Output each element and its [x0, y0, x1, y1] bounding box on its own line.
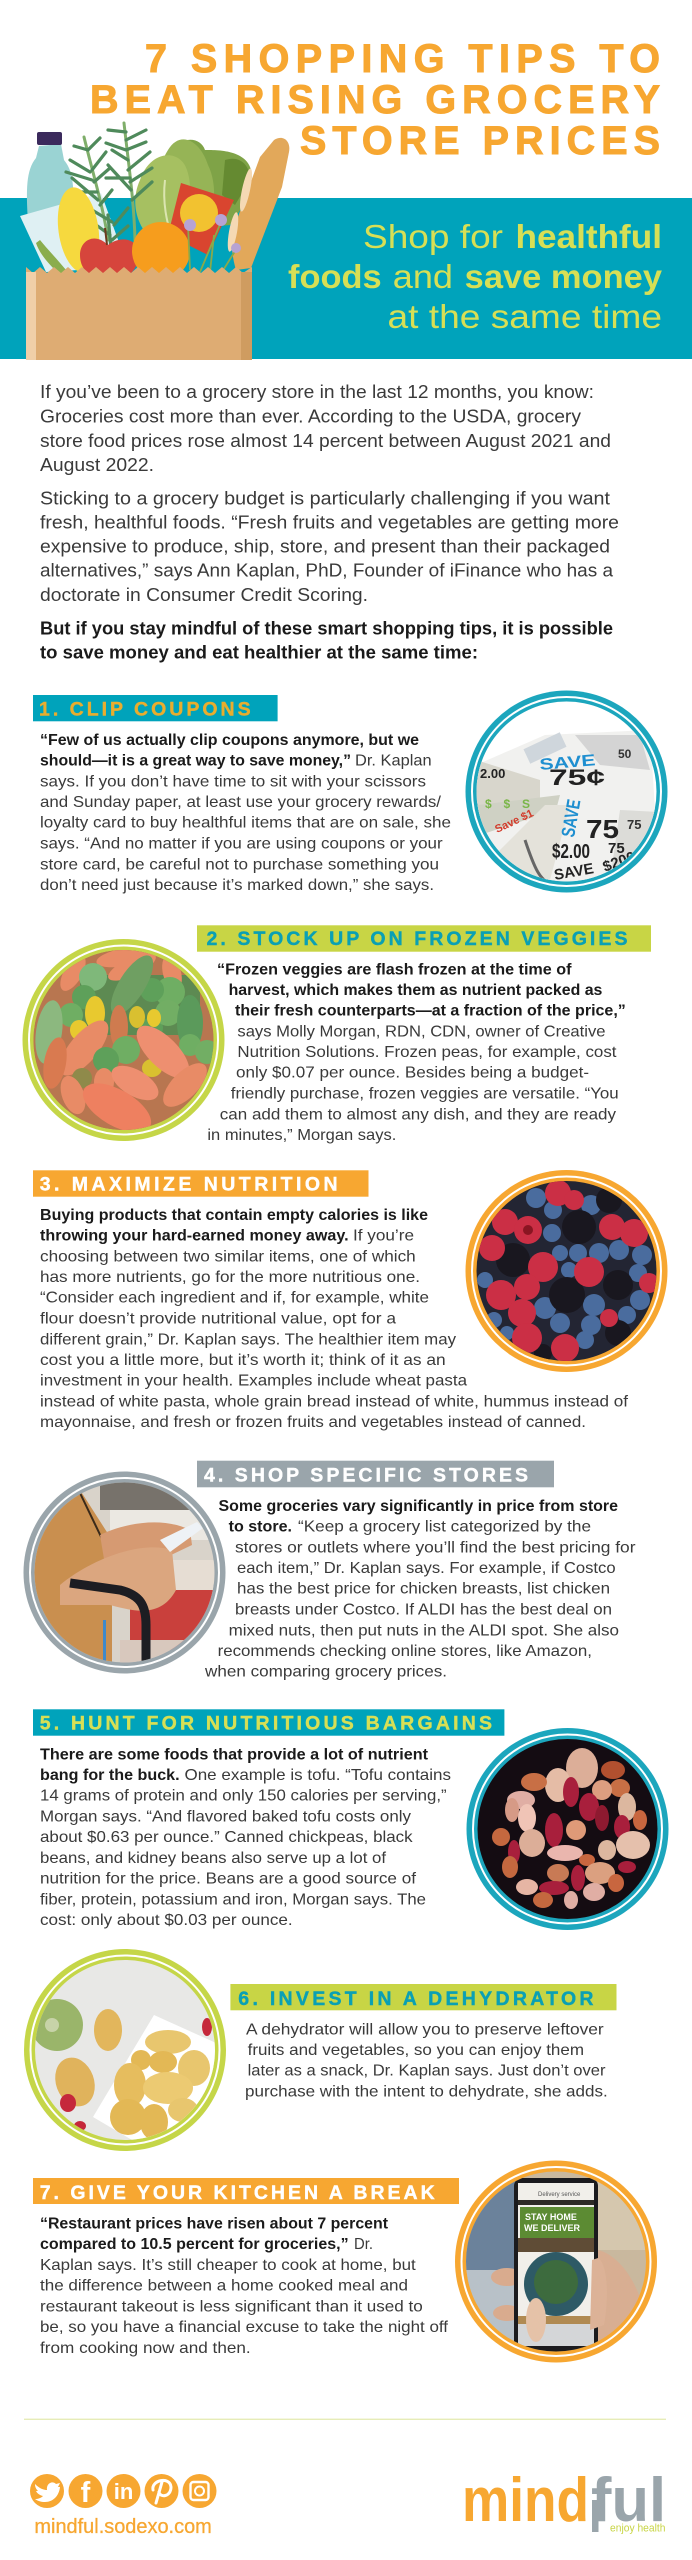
text block: tip 4: has the best price for chicken breasts, list chicken [237, 1581, 610, 1598]
text block: tip 5: bang for the buck. [40, 1767, 180, 1784]
text block: tip 2: in minutes,” Morgan says. [207, 1127, 396, 1144]
text block: tip 3: investment in your health. Examples include wheat pasta [40, 1373, 467, 1390]
text block: tip 6: A dehydrator will allow you to preserve leftover [246, 2021, 604, 2038]
text block: tip 5: One example is tofu. “Tofu contains [184, 1767, 451, 1784]
subtitle: foods [288, 258, 382, 295]
text block: tip 7: compared to 10.5 percent for groceries,” [40, 2236, 349, 2253]
footer divider [24, 2419, 666, 2420]
text block: tip 5: Morgan says. “And flavored baked tofu costs only [40, 1808, 411, 1825]
heading: tip 3: 3. MAXIMIZE NUTRITION [40, 1174, 338, 1196]
icon: baguette [226, 138, 289, 270]
text block: tip 6: purchase with the intent to dehydrate, she adds. [245, 2084, 608, 2101]
intro paragraph 2: alternatives,” says Ann Kaplan, PhD, Founder of iFinance who has a [40, 561, 614, 581]
photo: coupons: 2.00 [480, 766, 505, 781]
text block: tip 7: Kaplan says. It’s still cheaper to cook at home, but [40, 2257, 416, 2274]
text block: tip 7: the difference between a home cooked meal and [40, 2278, 408, 2295]
text block: tip 2: their fresh counterparts—at a fraction of the price,” [235, 1003, 626, 1020]
intro paragraph 1: August 2022. [40, 455, 154, 475]
heading: tip 5: 5. HUNT FOR NUTRITIOUS BARGAINS [40, 1712, 492, 1734]
panel: tip 4 shop specific stores [24, 1461, 636, 1681]
text block: tip 7: from cooking now and then. [40, 2340, 251, 2357]
intro bold statement: to save money and eat healthier at the same time: [40, 643, 478, 663]
text block: tip 3: Buying products that contain empty calories is like [40, 1207, 428, 1224]
intro paragraph 1 [40, 382, 611, 475]
panel: tip 7 kitchen break [33, 2160, 657, 2362]
photo: phone delivery app: Delivery service [538, 2192, 581, 2198]
icon: lettuce [135, 139, 252, 240]
photo: coupons: SAVE [553, 860, 595, 884]
logo: mindful: mind [462, 2466, 589, 2535]
intro paragraph 1: If you’ve been to a grocery store in the last 12 months, you know: [40, 382, 594, 402]
text block: tip 1 [40, 732, 451, 894]
text block: tip 7: be, so you have a financial excuse to take the night off [40, 2319, 449, 2336]
text block: tip 5: cost: only about $0.03 per ounce. [40, 1912, 293, 1929]
panel: tip 3 maximize nutrition [33, 1170, 668, 1431]
text block: tip 4: when comparing grocery prices. [204, 1664, 447, 1681]
text block: tip 5: fiber, protein, potassium and iron, Morgan says. The [40, 1891, 426, 1908]
intro paragraph 2 [40, 488, 619, 605]
intro bold statement [40, 618, 613, 663]
title [90, 37, 660, 163]
subtitle: and [393, 258, 453, 295]
icon: apple [80, 228, 139, 274]
subtitle: save money [465, 258, 663, 295]
intro paragraph 1: Groceries cost more than ever. According to the USDA, grocery [40, 407, 581, 427]
subtitle: Shop for [363, 218, 503, 255]
text block: tip 5: nutrition for the price. Beans are a good source of [40, 1871, 417, 1888]
icon: facebook [68, 2474, 102, 2509]
text block: tip 5: beans, and kidney beans also serve up a lot of [40, 1850, 387, 1867]
text block: tip 4: breasts under Costco. If ALDI has the best deal on [235, 1602, 612, 1619]
text block: tip 3: If you’re [353, 1228, 414, 1245]
photo: coupons: 50 [618, 747, 632, 761]
text block: tip 1: Dr. Kaplan [355, 753, 432, 770]
photo: frozen vegetables [22, 939, 224, 1143]
photo: phone delivery app [455, 2160, 657, 2362]
logo: mindful: ful [591, 2466, 666, 2535]
photo: coupons: SAVE [539, 752, 597, 774]
text block: tip 4: stores or outlets where you’ll find the best pricing for [235, 1539, 636, 1556]
icon: orange [132, 222, 190, 280]
photo: berries [466, 1170, 668, 1372]
panel: tip 6 dehydrator [24, 1949, 616, 2151]
text block: tip 1: don’t need just because it’s marked down,” she says. [40, 877, 434, 894]
icon: chives [184, 214, 241, 272]
intro bold statement: But if you stay mindful of these smart shopping tips, it is possible [40, 618, 613, 638]
heading: tip 6: 6. INVEST IN A DEHYDRATOR [238, 1988, 594, 2010]
photo: phone delivery app: STAY HOME [525, 2212, 577, 2222]
photo: shopper with list [24, 1472, 226, 1674]
icon: linkedin: in [114, 2479, 133, 2504]
text block: tip 1: says. “And no matter if you are using coupons or your [40, 835, 443, 852]
teal header band [0, 198, 692, 359]
logo: mindful: enjoy health [610, 2523, 666, 2535]
photo: coupons: $2.00 [552, 841, 590, 863]
subtitle [288, 218, 663, 335]
text block: tip 2: only $0.07 per ounce. Besides being a budget- [236, 1065, 589, 1082]
text block: tip 3: has more nutrients, go for the more nutritious one. [40, 1269, 420, 1286]
text block: tip 1: store card, be careful not to purchase something you [40, 856, 439, 873]
title: STORE PRICES [300, 119, 660, 163]
photo: coupons: SAVE [558, 798, 586, 839]
text block: tip 4: recommends checking online stores, like Amazon, [218, 1643, 592, 1660]
text block: tip 2 [207, 961, 626, 1144]
text block: tip 4 [204, 1498, 636, 1681]
text block: tip 5: 14 grams of protein and only 150 calories per serving,” [40, 1788, 447, 1805]
photo: phone delivery app: WE DELIVER [524, 2223, 581, 2233]
subtitle: at the same time [388, 298, 662, 335]
icon: corn [36, 185, 104, 275]
panel: tip 2 frozen veggies [22, 925, 651, 1144]
icon: linkedin [106, 2474, 140, 2508]
text block: tip 2: friendly purchase, frozen veggies are versatile. “You [231, 1085, 619, 1102]
text block: tip 4: mixed nuts, then put nuts in the ALDI spot. She also [229, 1622, 619, 1639]
text block: tip 3: mayonnaise, and fresh or frozen fruits and vegetables instead of canned. [40, 1414, 586, 1431]
heading: tip 2: 2. STOCK UP ON FROZEN VEGGIES [206, 928, 628, 950]
photo: coupons: 75 [608, 840, 625, 857]
icon: rosemary [66, 123, 152, 260]
heading: tip 4: 4. SHOP SPECIFIC STORES [204, 1465, 528, 1487]
text block: tip 3: throwing your hard-earned money away. [40, 1228, 349, 1245]
icon: pinterest [144, 2474, 178, 2508]
text block: tip 5: There are some foods that provide a lot of nutrient [40, 1746, 429, 1763]
text block: tip 3: cost you a little more, but it’s worth it; think of it as an [40, 1352, 446, 1369]
intro paragraph 2: Sticking to a grocery budget is particularly challenging if you want [40, 488, 610, 508]
heading: tip 7: 7. GIVE YOUR KITCHEN A BREAK [40, 2182, 435, 2204]
intro paragraph 1: store food prices rose almost 14 percent between August 2021 and [40, 431, 611, 451]
icon: cracker box [168, 183, 234, 255]
icon: instagram [182, 2474, 216, 2508]
photo: coupons: 75 [586, 814, 619, 844]
panel: tip 1 clip coupons [33, 690, 668, 894]
text block: tip 4: to store. [229, 1519, 292, 1536]
text block: tip 3 [40, 1207, 629, 1431]
text block: tip 3: flour doesn’t provide nutritional value, opt for a [40, 1310, 396, 1327]
text block: tip 1: says. If you don’t have time to sit with your scissors [40, 773, 426, 790]
text block: tip 1: and Sunday paper, at least use your grocery rewards/ [40, 794, 442, 811]
text block: tip 5 [40, 1746, 451, 1929]
photo: beans [466, 1728, 668, 1930]
icon: paper bag [26, 267, 252, 360]
text block: tip 6: later as a snack, Dr. Kaplan says. Just don’t over [248, 2063, 606, 2080]
heading: tip 1: 1. CLIP COUPONS [39, 699, 251, 721]
photo: coupons: $ $ S [485, 797, 530, 811]
text block: tip 4: each item,” Dr. Kaplan says. For example, if Costco [237, 1560, 616, 1577]
text block: tip 6: fruits and vegetables, so you can enjoy them [248, 2042, 584, 2059]
text block: tip 7 [40, 2215, 449, 2357]
text block: tip 7: restaurant takeout is less significant than it used to [40, 2298, 423, 2315]
text block: tip 5: about $0.63 per ounce.” Canned chickpeas, black [40, 1829, 414, 1846]
text block: tip 3: instead of white pasta, whole grain bread instead of white, hummus instead of [40, 1393, 629, 1410]
illustration: grocery bag [20, 123, 289, 360]
title: BEAT RISING GROCERY [90, 78, 660, 122]
title: 7 SHOPPING TIPS TO [145, 37, 660, 81]
panel: tip 5 nutritious bargains [33, 1709, 668, 1930]
intro paragraph 2: doctorate in Consumer Credit Scoring. [40, 585, 368, 605]
intro paragraph 2: expensive to produce, ship, store, and present than their packaged [40, 537, 610, 557]
intro paragraph 2: fresh, healthful foods. “Fresh fruits and vegetables are getting more [40, 512, 619, 532]
text block: tip 2: harvest, which makes them as nutrient packed as [229, 982, 602, 999]
photo: coupons: 75 [627, 817, 641, 832]
subtitle: healthful [516, 218, 662, 255]
text block: tip 3: choosing between two similar items, one of which [40, 1248, 416, 1265]
text block: tip 4: “Keep a grocery list categorized by the [298, 1519, 591, 1536]
text block: tip 7: “Restaurant prices have risen about 7 percent [40, 2215, 389, 2232]
text block: tip 6 [245, 2021, 608, 2101]
photo: coupons: 75¢ [549, 765, 605, 790]
website url: mindful.sodexo.com [34, 2516, 212, 2538]
icon: facebook: f [81, 2477, 91, 2509]
text block: tip 2: can add them to almost any dish, and they are ready [220, 1106, 616, 1123]
photo: dried fruit [24, 1949, 226, 2151]
text block: tip 7: Dr. [354, 2236, 373, 2253]
text block: tip 1: “Few of us actually clip coupons anymore, but we [40, 732, 419, 749]
text block: tip 2: says Molly Morgan, RDN, CDN, owner of Creative [237, 1023, 606, 1040]
photo: coupons [466, 690, 668, 892]
social icons [30, 2474, 216, 2509]
text block: tip 3: “Consider each ingredient and if, for example, white [40, 1290, 429, 1307]
text block: tip 4: Some groceries vary significantly in price from store [218, 1498, 618, 1515]
icon: water bottle [27, 132, 74, 222]
text block: tip 2: “Frozen veggies are flash frozen at the time of [217, 961, 572, 978]
text block: tip 1: should—it is a great way to save money,” [40, 753, 351, 770]
icon: twitter [30, 2474, 64, 2508]
text block: tip 3: different grain,” Dr. Kaplan says. The healthier item may [40, 1331, 456, 1348]
photo: coupons: Save $1 [493, 808, 535, 836]
photo: coupons: $200 [601, 848, 638, 876]
text block: tip 1: loyalty card to buy healthful items that are on sale, she [40, 815, 451, 832]
icon: carton [20, 193, 128, 272]
text block: tip 2: Nutrition Solutions. Frozen peas, for example, cost [237, 1044, 617, 1061]
